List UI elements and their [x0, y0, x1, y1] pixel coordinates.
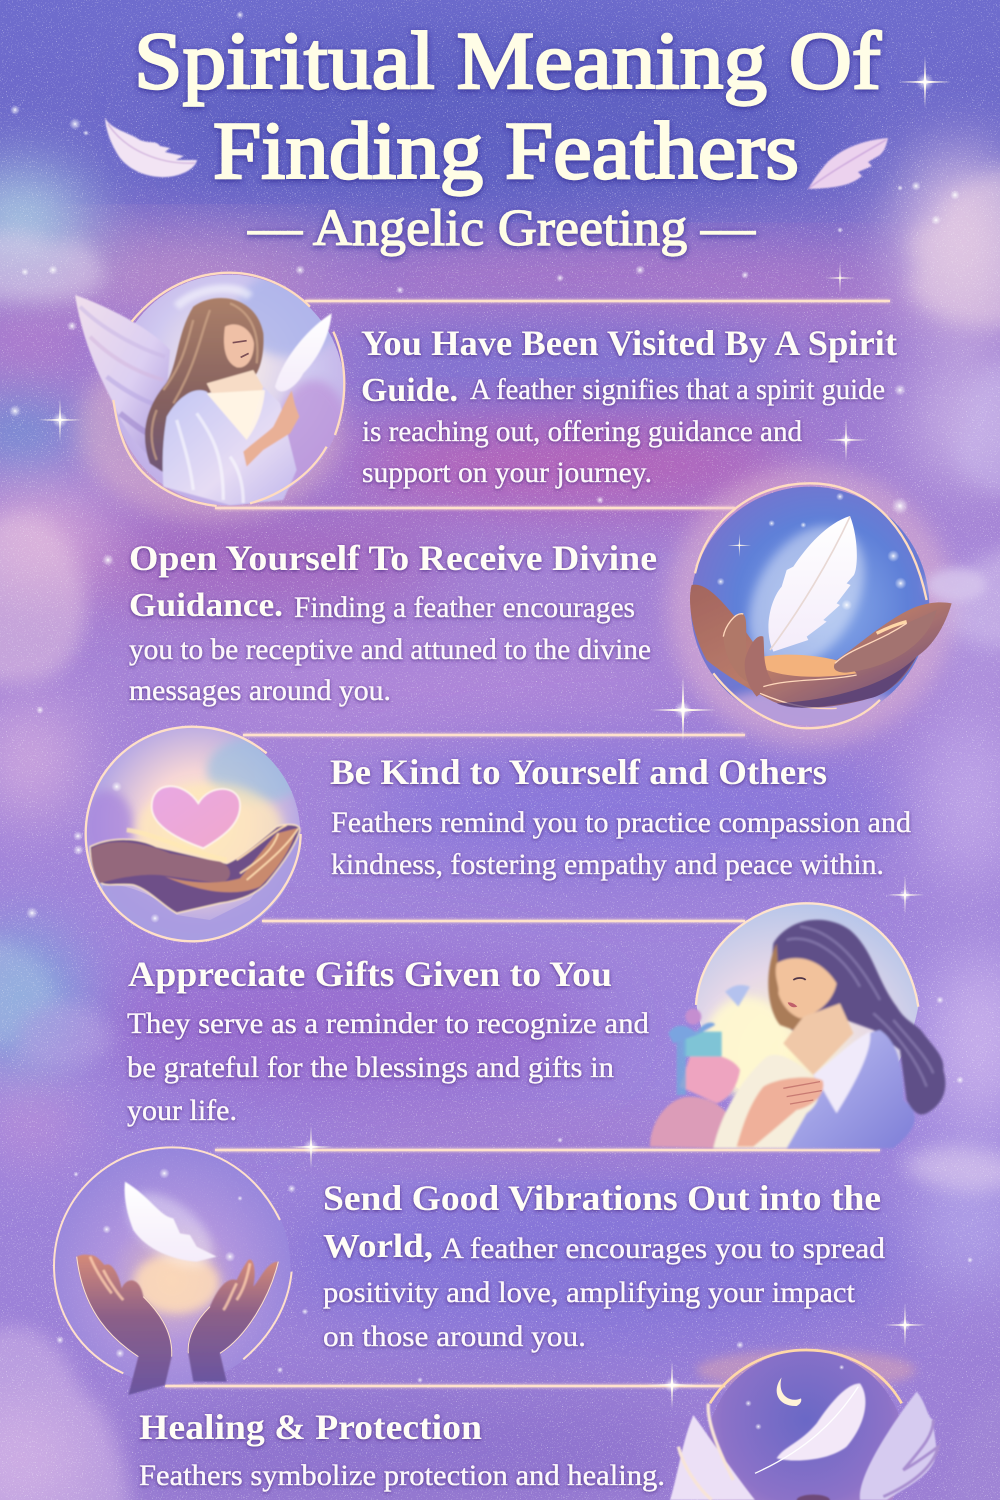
body text: World,	[323, 1228, 433, 1265]
body text: They serve as a reminder to recognize and	[127, 1007, 649, 1040]
heading: Healing & Protection	[139, 1407, 482, 1447]
panel: be kind	[73, 727, 911, 941]
title line 2: Finding Feathers	[213, 105, 799, 196]
icon: right title feather	[808, 138, 888, 189]
body text: Feathers remind you to practice compassion and	[331, 806, 911, 839]
heading: You Have Been Visited By A Spirit	[361, 323, 897, 363]
body text: Feathers symbolize protection and healing.	[139, 1459, 665, 1492]
body text	[323, 1228, 885, 1353]
body text: on those around you.	[323, 1320, 586, 1353]
body text	[129, 587, 651, 707]
body text: kindness, fostering empathy and peace within.	[331, 848, 884, 881]
body text	[361, 372, 885, 489]
heading: Be Kind to Yourself and Others	[330, 752, 827, 792]
body text: Finding a feather encourages	[294, 591, 635, 624]
body text	[331, 806, 911, 881]
heading: Appreciate Gifts Given to You	[128, 954, 612, 994]
body text: A feather encourages you to spread	[441, 1232, 885, 1265]
panel: healing and protection	[139, 1350, 938, 1500]
heading: Open Yourself To Receive Divine	[129, 538, 657, 578]
body text: positivity and love, amplifying your impact	[323, 1276, 856, 1309]
body text: support on your journey.	[362, 456, 652, 489]
icon: winged moon circle	[670, 1350, 938, 1500]
body text: Guidance.	[129, 587, 283, 624]
body text: your life.	[127, 1094, 237, 1127]
icon: angel with feather	[75, 270, 350, 520]
icon: raised hands with feather	[54, 1147, 308, 1395]
body text: is reaching out, offering guidance and	[362, 415, 802, 448]
title line 1: Spiritual Meaning Of	[134, 15, 882, 106]
icon: hand holding heart	[73, 727, 307, 941]
body text	[127, 1007, 649, 1127]
icon: woman with gift	[650, 903, 945, 1148]
icon: hand holding feather	[667, 466, 987, 747]
panel: appreciate gifts	[127, 903, 945, 1148]
heading: Send Good Vibrations Out into the	[323, 1178, 881, 1218]
icon: left title feather	[105, 118, 197, 177]
panel: spirit guide	[75, 270, 897, 520]
body text: A feather signifies that a spirit guide	[470, 373, 885, 406]
body text: you to be receptive and attuned to the divine	[129, 633, 651, 666]
title	[134, 15, 882, 257]
body text: messages around you.	[129, 674, 391, 707]
divider lines	[165, 301, 890, 1386]
panel: good vibrations	[54, 1147, 885, 1395]
subtitle: — Angelic Greeting —	[247, 200, 756, 257]
body text: be grateful for the blessings and gifts in	[127, 1051, 614, 1084]
body text: Guide.	[361, 372, 458, 409]
panel: divine guidance	[129, 466, 987, 747]
